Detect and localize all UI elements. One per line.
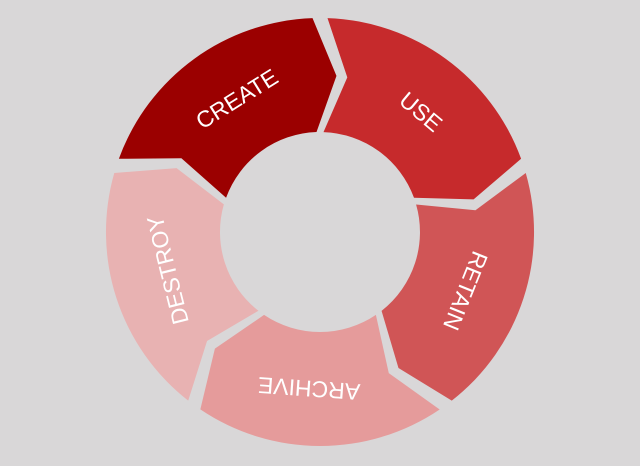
label: USE: USE — [394, 87, 447, 137]
segment: RETAIN — [352, 169, 586, 413]
label: ARCHIVE: ARCHIVE — [257, 372, 361, 405]
segment: DESTROY — [32, 140, 298, 403]
segment: USE — [324, 18, 521, 199]
segment: ARCHIVE — [176, 260, 443, 466]
segment: CREATE — [118, 0, 351, 219]
label: RETAIN: RETAIN — [438, 248, 493, 334]
label: DESTROY: DESTROY — [142, 213, 194, 327]
label: CREATE: CREATE — [191, 64, 283, 134]
